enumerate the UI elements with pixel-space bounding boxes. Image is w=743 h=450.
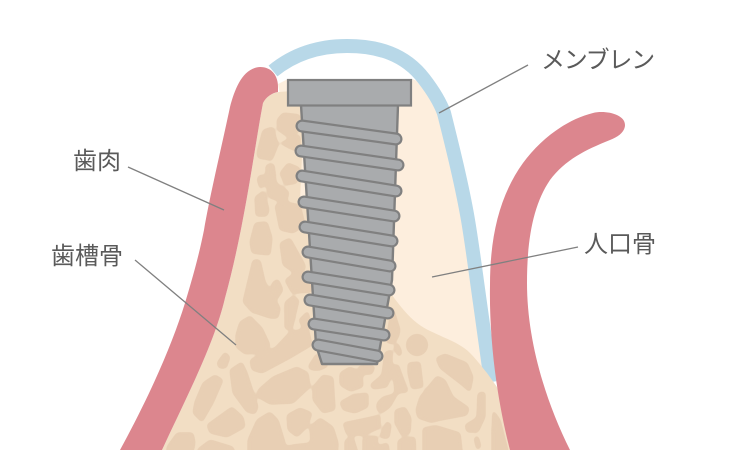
leader line: gum xyxy=(128,167,224,210)
implant xyxy=(288,80,411,364)
implant flange xyxy=(288,80,411,106)
right gum xyxy=(490,112,625,450)
artificial bone xyxy=(278,79,500,420)
left gum xyxy=(120,67,278,450)
alveolar bone xyxy=(162,90,512,450)
implant threads xyxy=(301,126,398,356)
leader line: membrane xyxy=(439,65,528,113)
label: gum: 歯肉 xyxy=(73,148,121,175)
bone spots xyxy=(167,113,510,450)
implant body xyxy=(301,105,398,364)
leader line: alveolar bone xyxy=(135,260,236,345)
label: membrane: メンブレン xyxy=(541,47,654,74)
label: alveolar bone: 歯槽骨 xyxy=(51,243,123,270)
label: artificial bone: 人口骨 xyxy=(584,231,656,258)
membrane xyxy=(273,46,491,382)
leader line: artificial bone xyxy=(432,247,578,277)
